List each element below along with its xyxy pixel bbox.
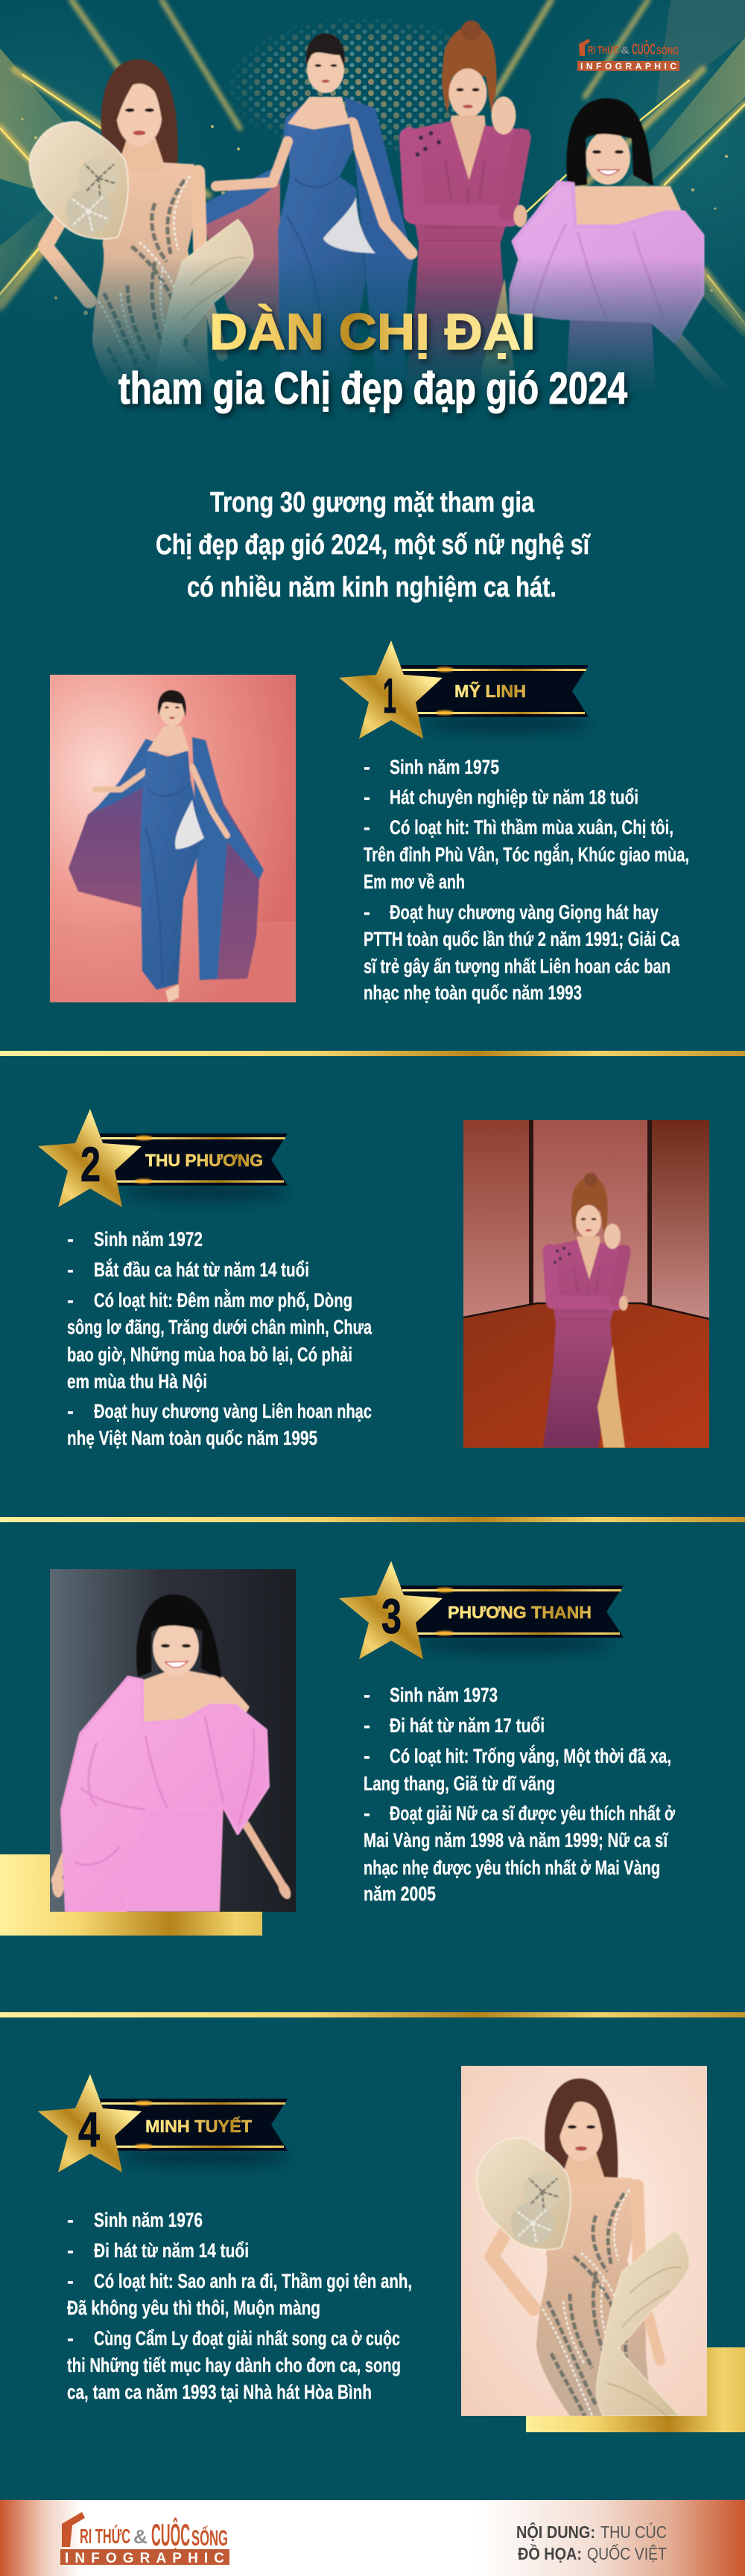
badge: star 2 and ribbon: THU PHƯƠNG (145, 1151, 263, 1170)
photo: Mỹ Linh (50, 675, 296, 1002)
header background rays (0, 0, 745, 350)
logo: Tri Thức & Cuộc Sống, header: CUỘC (632, 40, 656, 58)
text block: Mỹ Linh bio: - (364, 901, 370, 923)
credits: ĐỒ HỌA: (518, 2543, 582, 2563)
badge: star 1 and ribbon (339, 640, 589, 739)
badge: star 3 and ribbon (339, 1561, 624, 1659)
logo: Tri Thức & Cuộc Sống, footer: CUỘC (151, 2516, 190, 2552)
text block: Thu Phương bio: Sinh năm 1972 (94, 1228, 203, 1250)
photo: Phương Thanh (50, 1569, 296, 1912)
badge: star 2 and ribbon: 2 (80, 1136, 101, 1192)
logo: Tri Thức & Cuộc Sống, header: SỐNG (656, 44, 679, 57)
text block: Minh Tuyết bio: ca, tam ca năm 1993 tại Nhà hát Hòa Bình (67, 2381, 372, 2403)
badge: star 3 and ribbon: 3 (381, 1588, 402, 1644)
photo figure: Thu Phương in header (399, 21, 529, 433)
text block: Minh Tuyết bio: Đã không yêu thì thôi, Muộn màng (67, 2297, 320, 2319)
text block: Minh Tuyết bio: - (67, 2239, 74, 2262)
text block: Mỹ Linh bio: Sinh năm 1975 (390, 756, 499, 778)
intro text (156, 487, 591, 603)
text block: Minh Tuyết bio: Có loạt hit: Sao anh ra đi, Thầm gọi tên anh, (94, 2270, 412, 2292)
panel: Phương Thanh (0, 1561, 676, 1936)
text block: Phương Thanh bio: - (364, 1802, 370, 1825)
logo: Tri Thức & Cuộc Sống, header (577, 39, 679, 71)
text block: Minh Tuyết bio: thi Những tiết mục hay dành cho đơn ca, song (67, 2354, 401, 2376)
text block: Thu Phương bio: - (67, 1400, 74, 1422)
text block: Minh Tuyết bio: - (67, 2209, 74, 2231)
badge: star 1 and ribbon: 1 (383, 668, 396, 723)
intro text: có nhiều năm kinh nghiệm ca hát. (187, 572, 557, 603)
header banner (0, 0, 745, 447)
text block: Minh Tuyết bio: Cùng Cẩm Ly đoạt giải nhất song ca ở cuộc (94, 2327, 400, 2350)
text block: Mỹ Linh bio: nhạc nhẹ toàn quốc năm 1993 (364, 982, 582, 1004)
logo: Tri Thức & Cuộc Sống, footer (60, 2512, 229, 2566)
text block: Mỹ Linh bio: - (364, 816, 370, 839)
text block: Thu Phương bio: Có loạt hit: Đêm nằm mơ phố, Dòng (94, 1288, 352, 1311)
photo: Minh Tuyết (461, 2066, 707, 2416)
text block: Mỹ Linh bio: Đoạt huy chương vàng Giọng hát hay (390, 901, 659, 923)
text block: Minh Tuyết bio: - (67, 2270, 74, 2292)
credits: THU CÚC (600, 2522, 667, 2542)
text block: Phương Thanh bio: Sinh năm 1973 (390, 1684, 498, 1706)
badge: star 4 and ribbon: 4 (78, 2102, 100, 2157)
header bottom fade (0, 257, 745, 447)
text block: Phương Thanh bio: - (364, 1714, 370, 1737)
text block: Thu Phương bio: Bắt đầu ca hát từ năm 14 tuổi (94, 1258, 309, 1281)
badge: star 1 and ribbon: MỸ LINH (454, 681, 526, 701)
badge: star 2 and ribbon (38, 1109, 288, 1207)
text block: Mỹ Linh bio: Em mơ về anh (364, 871, 465, 893)
badge: star 3 and ribbon: PHƯƠNG THANH (448, 1603, 592, 1622)
logo: Tri Thức & Cuộc Sống, footer: SỐNG (191, 2525, 228, 2551)
text block: Phương Thanh bio (364, 1684, 676, 1905)
text block: Phương Thanh bio: năm 2005 (364, 1883, 436, 1905)
subtitle: tham gia Chị đẹp đạp gió 2024: tham gia Chị đẹp đạp gió 2024 (118, 363, 627, 413)
text block: Phương Thanh bio: Đi hát từ năm 17 tuổi (390, 1714, 545, 1737)
text block: Thu Phương bio: em mùa thu Hà Nội (67, 1370, 207, 1393)
credits: NỘI DUNG: (516, 2522, 595, 2542)
credits (516, 2522, 667, 2563)
gold L-shaped accent (526, 2347, 745, 2432)
credits: QUỐC VIỆT (587, 2543, 667, 2563)
text block: Minh Tuyết bio: Đi hát từ năm 14 tuổi (94, 2239, 249, 2262)
logo: Tri Thức & Cuộc Sống, header: INFOGRAPHIC (580, 61, 676, 71)
text block: Thu Phương bio: sông lơ đãng, Trăng dưới chân mình, Chưa (67, 1316, 372, 1338)
logo: Tri Thức & Cuộc Sống, header: RI THỨC (588, 43, 619, 57)
text block: Thu Phương bio: - (67, 1228, 74, 1250)
footer (0, 2500, 745, 2576)
text block: Thu Phương bio: - (67, 1259, 74, 1281)
photo figure: Phương Thanh in header (511, 98, 722, 392)
text block: Thu Phương bio: nhẹ Việt Nam toàn quốc năm 1995 (67, 1427, 317, 1449)
text block: Thu Phương bio (67, 1228, 372, 1449)
text block: Phương Thanh bio: Lang thang, Giã từ dĩ vãng (364, 1772, 555, 1795)
text block: Phương Thanh bio: - (364, 1684, 370, 1706)
text block: Mỹ Linh bio (364, 756, 689, 1004)
badge: star 4 and ribbon (38, 2074, 288, 2172)
logo: Tri Thức & Cuộc Sống, footer: RI THỨC (80, 2525, 130, 2548)
photo figure: Minh Tuyết in header (30, 60, 253, 413)
badge: star 4 and ribbon: MINH TUYẾT (145, 2116, 252, 2136)
logo: Tri Thức & Cuộc Sống, footer: & (133, 2525, 148, 2548)
text block: Thu Phương bio: - (67, 1289, 74, 1311)
logo: Tri Thức & Cuộc Sống, footer: INFOGRAPHIC (65, 2551, 224, 2566)
photo: Thu Phương (463, 1120, 709, 1448)
logo: Tri Thức & Cuộc Sống, header: & (621, 44, 630, 56)
gold L-shaped accent (0, 1854, 262, 1936)
text block: Thu Phương bio: bao giờ, Những mùa hoa bỏ lại, Có phải (67, 1343, 352, 1366)
text block: Mỹ Linh bio: Hát chuyên nghiệp từ năm 18 tuổi (390, 786, 638, 809)
panel: Thu Phương (38, 1109, 709, 1449)
text block: Mỹ Linh bio: - (364, 756, 370, 778)
intro text: Chị đẹp đạp gió 2024, một số nữ nghệ sĩ (156, 529, 591, 561)
text block: Minh Tuyết bio: - (67, 2327, 74, 2350)
photo figure: Mỹ Linh in header (202, 34, 413, 380)
text block: Minh Tuyết bio (67, 2209, 412, 2403)
panel: Mỹ Linh (50, 640, 689, 1004)
panel: Minh Tuyết (38, 2066, 745, 2432)
title: Dàn chị đại: DÀN CHỊ ĐẠI (209, 303, 536, 360)
intro text: Trong 30 gương mặt tham gia (210, 487, 535, 518)
text block: Thu Phương bio: Đoạt huy chương vàng Liên hoan nhạc (94, 1400, 372, 1422)
text block: Mỹ Linh bio: - (364, 786, 370, 809)
text block: Minh Tuyết bio: Sinh năm 1976 (94, 2209, 203, 2231)
text block: Phương Thanh bio: - (364, 1745, 370, 1767)
